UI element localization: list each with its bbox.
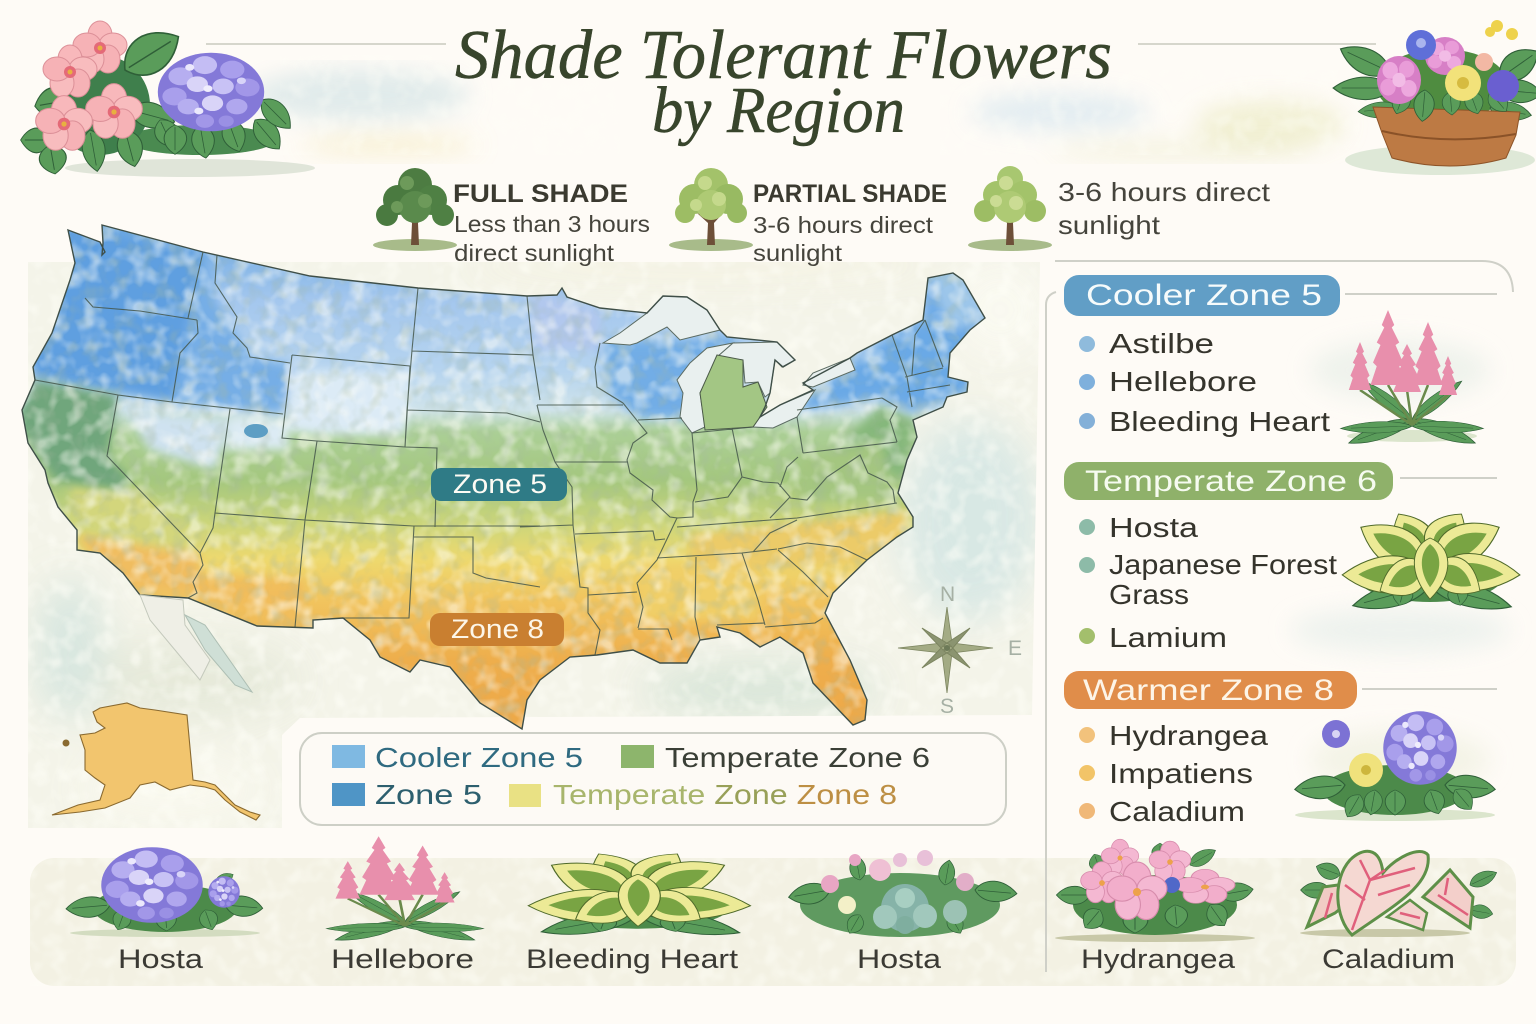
state lines (35, 252, 950, 655)
icon: light tree (669, 168, 753, 251)
great salt lake (244, 424, 268, 438)
compass rose: E (1008, 637, 1022, 660)
swatch: temperate zone 6 (621, 745, 654, 768)
swatch: zone 5 (332, 783, 365, 806)
plant: hydrangea labelled hosta: Hosta (118, 944, 204, 974)
map watercolor backdrop (28, 240, 1050, 830)
icon: dark tree (373, 168, 457, 251)
panel: zone lists (1064, 275, 1521, 827)
section: temperate zone 6: Hosta (1109, 512, 1199, 543)
header watercolor wash (250, 55, 1360, 155)
plant: impatiens labelled hydrangea: Hydrangea (1081, 944, 1236, 974)
section: cooler zone 5: Astilbe (1109, 328, 1214, 359)
section: cooler zone 5: Cooler Zone 5 (1086, 279, 1322, 312)
swatch: temperate zone 8 (509, 784, 541, 807)
section: temperate zone 6 (1064, 462, 1521, 653)
legend box: zones: Cooler Zone 5 (375, 742, 583, 773)
section: warmer zone 8: Caladium (1109, 796, 1245, 827)
section: warmer zone 8: Impatiens (1109, 758, 1253, 789)
legend: full shade (373, 168, 650, 266)
legend: dappled shade (968, 166, 1271, 251)
title: by Region (652, 74, 905, 147)
plant: mixed foliage labelled hosta: Hosta (857, 944, 942, 974)
plant: hosta labelled bleeding heart: Bleeding Heart (526, 944, 739, 974)
compass rose: S (940, 695, 954, 718)
great lakes (603, 296, 855, 433)
legend: full shade: direct sunlight (454, 240, 615, 266)
michigan lower peninsula (700, 355, 767, 430)
title (455, 17, 1112, 147)
legend box: zones (300, 733, 1006, 825)
swatch: cooler zone 5 (332, 745, 365, 768)
legend: partial shade: 3-6 hours direct (753, 212, 934, 238)
title: Shade Tolerant Flowers (455, 17, 1112, 94)
plant: hosta labelled bleeding heart (526, 844, 751, 974)
compass rose: N (940, 583, 955, 606)
illustration: hydrangea with primrose (1294, 711, 1496, 821)
panel washes (1290, 340, 1510, 790)
section: warmer zone 8: Warmer Zone 8 (1083, 674, 1334, 707)
section: temperate zone 6: Grass (1109, 579, 1189, 610)
illustration: flower pot (1333, 20, 1536, 175)
illustration: impatiens and hydrangea cluster (21, 20, 315, 177)
illustration: hosta (1342, 503, 1521, 617)
section: temperate zone 6: Lamium (1109, 622, 1227, 653)
legend: full shade: Less than 3 hours (454, 211, 650, 237)
map: alaska inset (52, 703, 260, 820)
map: contiguous United States zones (0, 220, 1000, 740)
legend: dappled shade: 3-6 hours direct (1058, 177, 1271, 207)
section: cooler zone 5: Bleeding Heart (1109, 406, 1330, 437)
map label: zone 8: Zone 8 (451, 614, 544, 644)
section: warmer zone 8 (1064, 671, 1497, 827)
panel divider and outline (1046, 261, 1513, 972)
section: temperate zone 6: Japanese Forest (1109, 549, 1337, 580)
legend box: zones: Temperate Zone Zone 8 (553, 779, 897, 810)
section: warmer zone 8: Hydrangea (1109, 720, 1268, 751)
baja california (140, 595, 252, 692)
illustration: astilbe (1340, 310, 1484, 450)
plant strip (30, 858, 1516, 986)
plant: caladium: Caladium (1322, 944, 1455, 974)
compass rose (898, 583, 1022, 718)
legend box: zones: Temperate Zone 6 (665, 742, 930, 773)
plant: astilbe labelled hellebore: Hellebore (331, 944, 474, 974)
plant: impatiens labelled hydrangea (1055, 839, 1255, 974)
plant: mixed foliage labelled hosta (787, 850, 1018, 974)
legend box: zones: Zone 5 (375, 779, 482, 810)
legend: partial shade (669, 168, 947, 266)
map label: zone 8 (430, 613, 564, 646)
icon: pale tree (968, 166, 1052, 251)
legend: partial shade: sunlight (753, 240, 843, 266)
plant: hydrangea labelled hosta (65, 847, 264, 974)
section: cooler zone 5: Hellebore (1109, 366, 1257, 397)
legend: partial shade: PARTIAL SHADE (753, 180, 947, 208)
plant: astilbe labelled hellebore (326, 836, 484, 974)
legend: dappled shade: sunlight (1058, 210, 1161, 240)
map label: zone 5 (431, 468, 567, 501)
map label: zone 5: Zone 5 (453, 469, 547, 499)
section: temperate zone 6: Temperate Zone 6 (1085, 465, 1377, 498)
section: cooler zone 5 (1064, 275, 1497, 450)
legend: full shade: FULL SHADE (453, 180, 628, 208)
plant: caladium (1300, 851, 1499, 974)
